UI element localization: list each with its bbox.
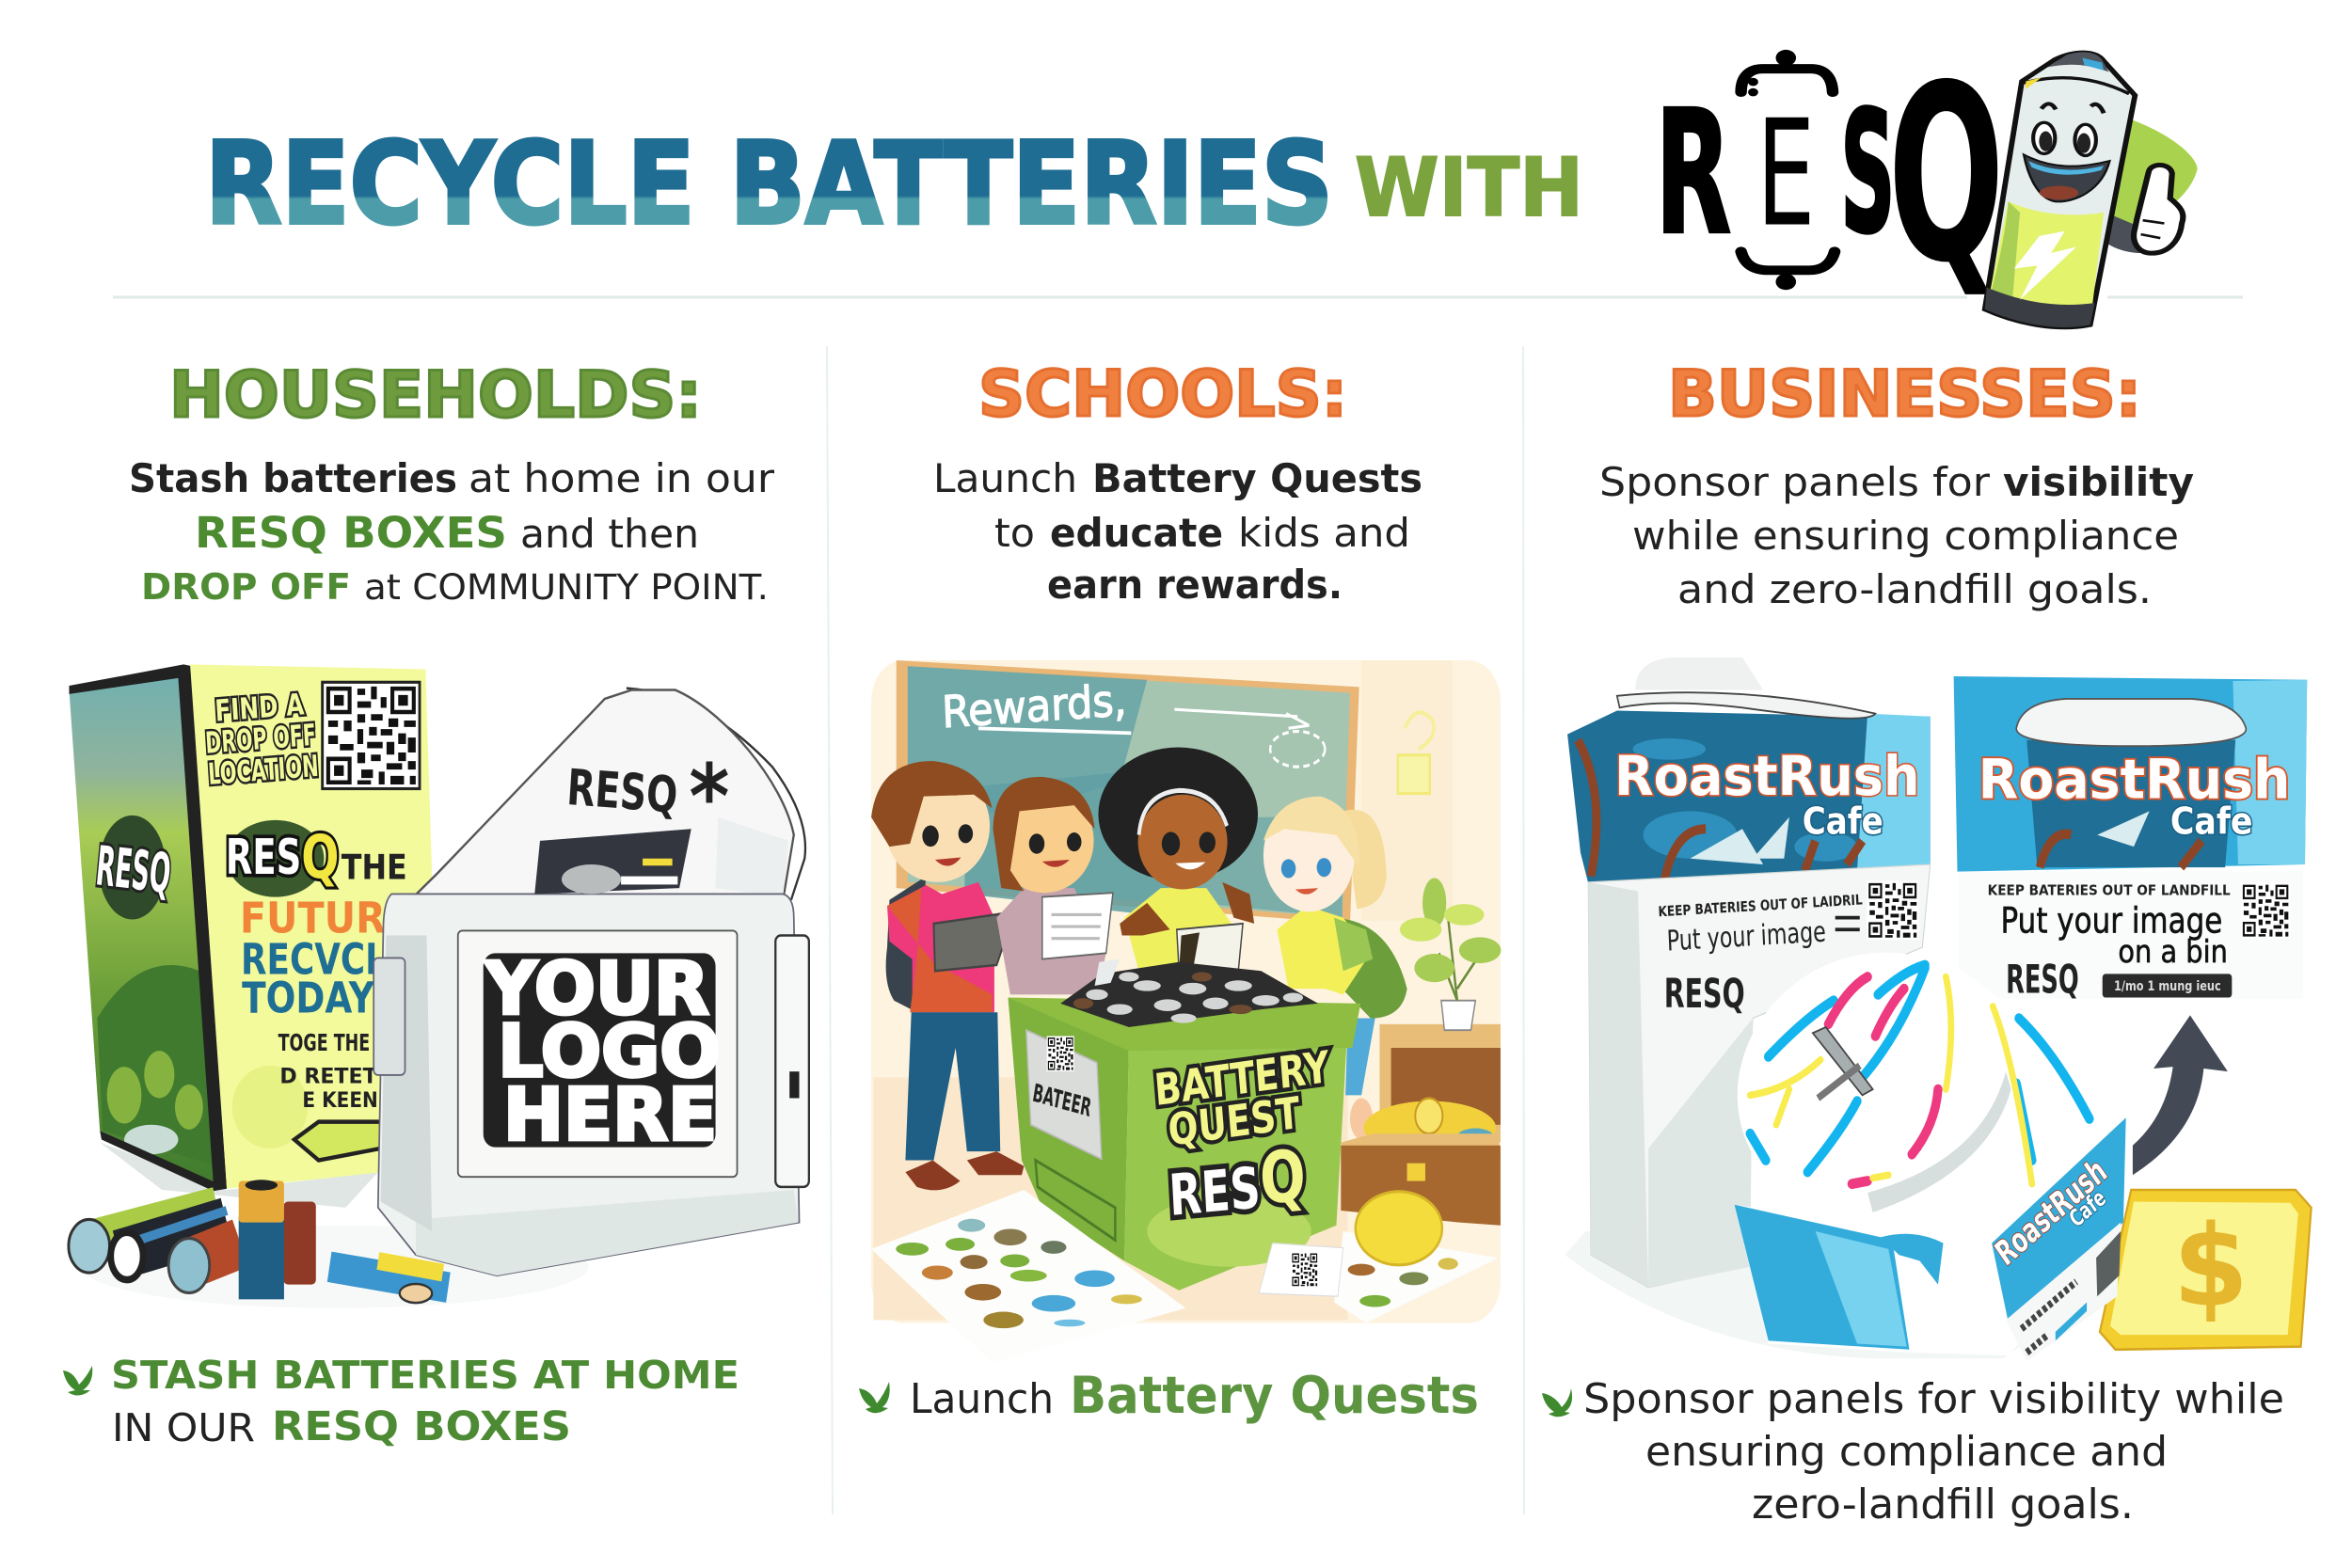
callout: sponsor panels: Sponsor panels for visibility while xyxy=(1583,1375,2284,1423)
text block: households description: RESQ BOXES xyxy=(195,508,507,558)
bin with paint splatter xyxy=(1711,919,2128,1361)
text block: schools description xyxy=(933,455,1422,608)
cardboard recycling box: DROP OFF xyxy=(204,719,317,761)
illustration: collection boxes and batteries xyxy=(69,664,809,1308)
qr label on bin xyxy=(1026,1030,1102,1159)
logo panel xyxy=(458,930,738,1177)
RESQ wordmark xyxy=(1655,33,2004,317)
sponsor panel before xyxy=(1567,657,1931,1288)
logo: RESQ wordmark with battery mascot: Q xyxy=(1888,33,2004,317)
cardboard recycling box: E KEEN xyxy=(302,1088,378,1113)
text block: businesses description xyxy=(1599,459,2194,612)
text block: households description: at home in our xyxy=(469,455,775,501)
title: with: WITH xyxy=(1355,141,1583,235)
battery quest bin: QUEST xyxy=(1166,1086,1302,1156)
callout: launch battery quests xyxy=(859,1366,1479,1425)
roastrush label on bin: Cafe xyxy=(2064,1183,2110,1233)
cardboard recycling box: D RETET xyxy=(279,1065,377,1089)
text block: schools description: Launch xyxy=(933,455,1077,501)
callout: sponsor panels: ensuring compliance and xyxy=(1645,1428,2168,1476)
text block: businesses description: and zero-landfill goals. xyxy=(1677,566,2152,612)
child: girl with curly hair xyxy=(1098,747,1258,971)
text block: schools description: to xyxy=(994,510,1035,556)
child: blonde girl with backpack xyxy=(1263,797,1407,1140)
icon: leaf check xyxy=(63,1366,92,1396)
RESQ wordmark: E xyxy=(1756,88,1815,260)
callout: launch battery quests: Launch xyxy=(910,1375,1054,1423)
battery quest bin xyxy=(1008,959,1360,1291)
panel: schools xyxy=(859,357,1501,1425)
text block: businesses description: visibility xyxy=(2003,459,2194,505)
sponsor panel before: Put your image xyxy=(1666,915,1827,958)
icon: leaf check xyxy=(859,1382,890,1413)
logo panel: LOGO xyxy=(498,1010,721,1094)
callout: stash batteries xyxy=(63,1353,739,1450)
callout: stash batteries: RESQ BOXES xyxy=(272,1403,571,1450)
cardboard recycling box: RES xyxy=(226,829,301,886)
logo: RESQ wordmark with battery mascot xyxy=(1655,33,2198,327)
cardboard recycling box: FIND A xyxy=(214,688,306,729)
white collection bin: * xyxy=(689,746,729,849)
callout: sponsor panels: zero-landfill goals. xyxy=(1752,1481,2134,1528)
icon: battery mascot xyxy=(1985,52,2198,327)
money tile: $ xyxy=(2173,1200,2249,1332)
text block: households description xyxy=(129,455,775,608)
classroom background xyxy=(871,660,1501,1323)
text block: schools description: educate xyxy=(1050,510,1223,556)
roastrush label on bin xyxy=(1989,1117,2126,1361)
title: recycle batteries: RECYCLE BATTERIES xyxy=(205,119,1333,250)
money tile xyxy=(2100,1190,2312,1350)
child: girl with paper xyxy=(993,777,1113,994)
callout: stash batteries: IN OUR xyxy=(112,1405,255,1450)
cardboard recycling box: TODAY xyxy=(242,974,374,1023)
battery quest bin: Q xyxy=(1258,1133,1308,1221)
sponsor panel before: Cafe xyxy=(1803,800,1883,843)
text block: households description: and then xyxy=(520,511,699,557)
heading: businesses: BUSINESSES: xyxy=(1668,357,2141,432)
RESQ wordmark: R xyxy=(1655,74,1731,273)
callout: stash batteries: STASH BATTERIES AT HOME xyxy=(111,1353,739,1398)
cardboard recycling box xyxy=(69,664,432,1191)
cardboard recycling box: Q xyxy=(301,823,339,893)
treasure chest and plant xyxy=(1341,878,1501,1226)
heading: households: HOUSEHOLDS: xyxy=(169,358,702,433)
header divider xyxy=(113,295,2243,299)
text block: households description: DROP OFF xyxy=(141,566,351,608)
cardboard recycling box: FUTUR xyxy=(240,895,386,943)
panel: businesses xyxy=(1542,357,2312,1528)
text block: schools description: kids and xyxy=(1238,510,1410,556)
text block: households description: at COMMUNITY POINT. xyxy=(364,567,769,608)
sponsor panel before: RESQ xyxy=(1664,971,1745,1018)
arrow xyxy=(2133,1015,2228,1175)
sponsor panel after: on a bin xyxy=(2118,934,2228,970)
sponsor panel after: KEEP BATERIES OUT OF LANDFILL xyxy=(1988,883,2231,899)
title xyxy=(205,119,1583,250)
loose batteries xyxy=(69,1180,448,1303)
sponsor panel after: Cafe xyxy=(2170,800,2253,843)
qr label on bin: BATEER xyxy=(1031,1078,1093,1123)
heading: schools: SCHOOLS: xyxy=(978,357,1347,432)
classroom background: Rewards, xyxy=(941,673,1127,738)
sponsor panel after: 1/mo 1 mung ieuc xyxy=(2114,979,2221,994)
logo panel: HERE xyxy=(503,1074,717,1157)
sponsor panel after: RESQ xyxy=(2006,958,2079,1003)
icon: leaf check xyxy=(1542,1388,1572,1417)
sponsor panel after xyxy=(1954,676,2307,1003)
cardboard recycling box: THE xyxy=(342,848,407,888)
sponsor panel before: KEEP BATERIES OUT OF LAIDRIL xyxy=(1658,893,1863,921)
cardboard recycling box: TOGE THE xyxy=(278,1029,370,1056)
cardboard recycling box: RESQ xyxy=(93,835,173,907)
white collection bin: RESQ xyxy=(565,758,679,824)
battery quest bin: RES xyxy=(1168,1154,1262,1229)
callout: sponsor panels xyxy=(1542,1375,2284,1528)
text block: schools description: earn rewards. xyxy=(1047,562,1343,608)
text block: businesses description: while ensuring compliance xyxy=(1632,513,2179,559)
sponsor panel before: RoastRush xyxy=(1614,744,1920,808)
white collection bin xyxy=(373,689,809,1275)
sponsor panel after: Put your image xyxy=(2001,900,2222,942)
text block: businesses description: Sponsor panels for xyxy=(1599,459,1991,505)
roastrush label on bin: RoastRush xyxy=(1989,1151,2114,1274)
cardboard recycling box: LOCATION xyxy=(207,750,320,792)
sticker sheets xyxy=(871,1190,1499,1363)
illustration: kids with battery quest bin xyxy=(871,660,1501,1363)
text block: schools description: Battery Quests xyxy=(1092,455,1422,501)
logo panel: YOUR xyxy=(484,948,709,1031)
callout: launch battery quests: Battery Quests xyxy=(1070,1366,1479,1425)
illustration: sponsor panels on bin xyxy=(1565,657,2312,1361)
panel: households xyxy=(63,358,809,1450)
sponsor panel after: RoastRush xyxy=(1979,747,2290,811)
RESQ wordmark: S xyxy=(1840,76,1895,271)
child: boy with tablet xyxy=(871,761,1024,1190)
cardboard recycling box: RECVCL xyxy=(241,936,387,985)
battery quest bin: BATTERY xyxy=(1152,1040,1332,1116)
text block: households description: Stash batteries xyxy=(129,455,457,501)
